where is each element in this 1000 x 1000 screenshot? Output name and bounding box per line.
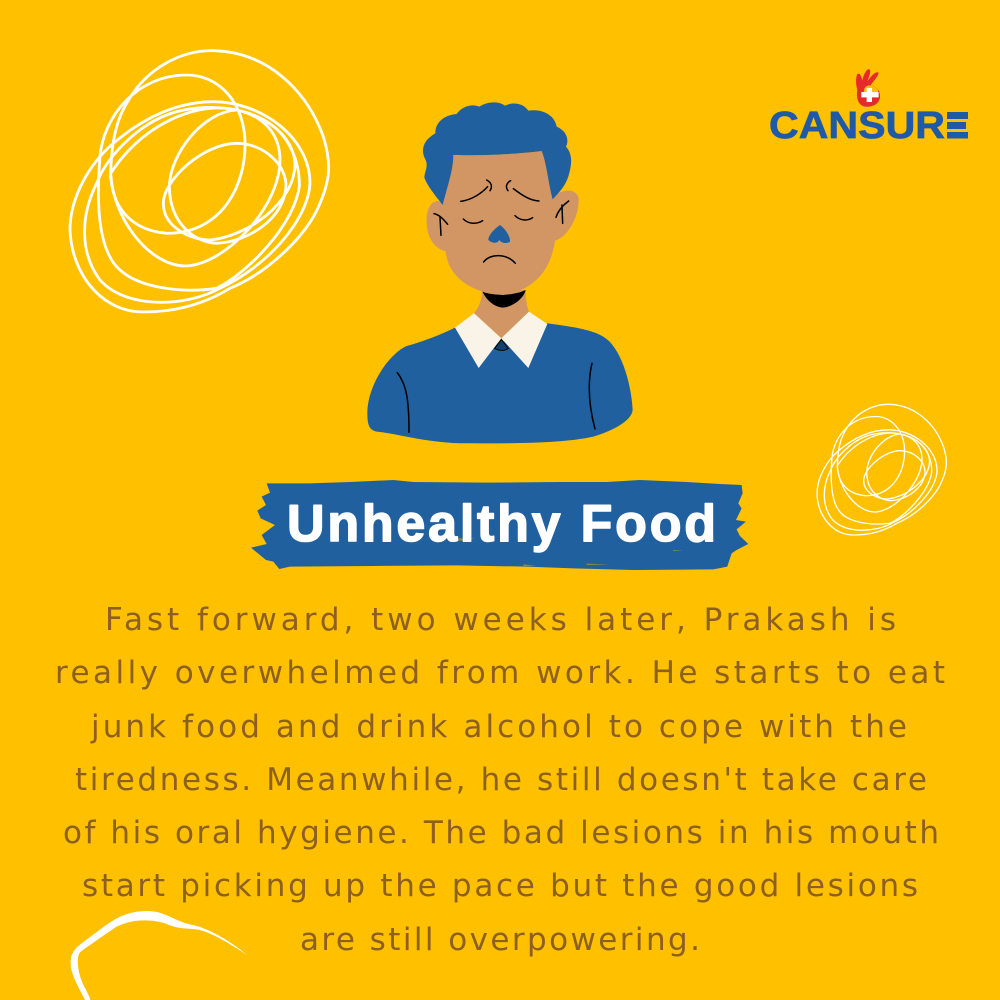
face and sweater lines <box>397 180 595 432</box>
scribble: top left <box>70 51 329 312</box>
brush stroke <box>251 480 748 570</box>
collar button <box>495 339 508 351</box>
icon: red hand with cross <box>856 69 880 107</box>
logo: CANSURE <box>769 69 968 147</box>
sweater <box>367 323 633 443</box>
body text: start picking up the pace but the good lesions <box>82 868 918 904</box>
logo wordmark: CANSUR <box>769 105 945 147</box>
hair <box>423 102 571 205</box>
logo E bars <box>947 112 968 138</box>
neck shadow <box>482 290 526 308</box>
body text <box>55 602 945 958</box>
body text: junk food and drink alcohol to cope with the <box>90 709 907 745</box>
collar <box>455 312 547 368</box>
body text: tiredness. Meanwhile, he still doesn't take care <box>75 762 927 798</box>
heading text: Unhealthy Food <box>287 495 716 553</box>
body text: of his oral hygiene. The bad lesions in his mouth <box>63 815 939 851</box>
illustration: sad man <box>367 102 633 443</box>
scribble: bottom left curve <box>71 911 247 1000</box>
face <box>442 151 556 295</box>
body text: really overwhelmed from work. He starts to eat <box>55 655 945 691</box>
body text: are still overpowering. <box>300 922 700 958</box>
ears <box>427 190 579 252</box>
nose <box>488 225 510 243</box>
heading: Unhealthy Food banner <box>251 480 748 570</box>
neck <box>474 290 529 338</box>
body text: Fast forward, two weeks later, Prakash is <box>105 602 896 638</box>
scribble: right <box>817 404 946 535</box>
